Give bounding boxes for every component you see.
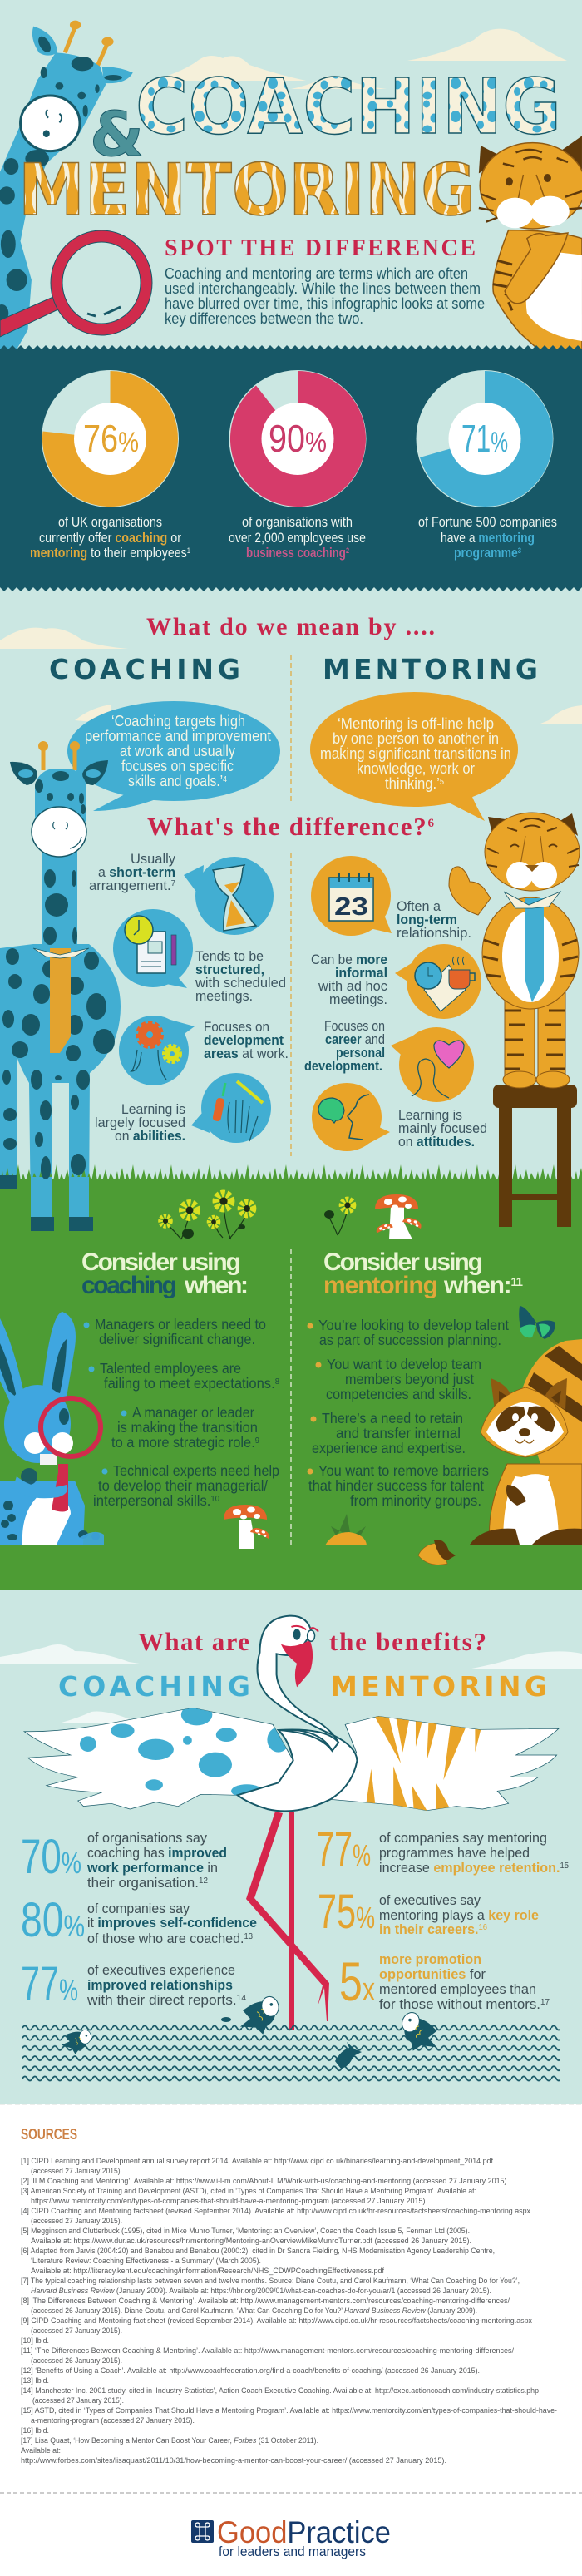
list: coaching: 8 (275, 1377, 279, 1387)
stat: 77% mentoring: 77% (316, 1822, 371, 1876)
heading: mentoring: MENTORING (330, 1670, 547, 1703)
divider (290, 655, 292, 804)
text block: source list: [7] The typical coaching relationship lasts between seven and twelve months. Source: Diane Coutu, and Carol Kaufmann, ‘What Can Coaching Do for You?’, (21, 2277, 520, 2286)
cloud: what do we mean (0, 628, 128, 649)
text block: source list: (accessed 27 January 2015). (31, 2326, 122, 2336)
text block: source list: [13] Ibid. (21, 2376, 49, 2386)
divider (0, 2492, 582, 2494)
illustration: magnifying glass (0, 230, 152, 337)
text: short-term: 7 (171, 879, 175, 888)
text block: source list: (accessed 27 January 2015). (32, 2396, 124, 2405)
text block: source list: Available at: (21, 2446, 61, 2455)
heading: consider coaching: Consider using (81, 1248, 241, 1276)
donut chart: 90%: 90% (269, 417, 327, 460)
intro paragraph: used interchangeably. While the lines between them (165, 280, 481, 297)
text: informal: Can be more (311, 952, 387, 967)
icon bubble: hourglass (184, 857, 274, 935)
text block: source list: (accessed 26 January 2015). (31, 2356, 122, 2366)
fish: jumping (234, 1995, 284, 2040)
list: coaching: is making the transition (117, 1419, 258, 1436)
text block: source list (21, 2157, 557, 2465)
stat: 77% coaching: with their direct reports. (87, 1992, 234, 2008)
stat: 77% mentoring: programmes have helped (379, 1845, 530, 1861)
text block: source list: [4] CIPD Coaching and Mentoring factsheet (revised September 2014). Available at: http://www.cipd.co.uk/hr-resources/factsheets/coaching-mentoring.aspx (21, 2207, 530, 2216)
speech bubble: coaching definition (67, 701, 280, 811)
heading: consider mentoring: mentoring (323, 1272, 438, 1299)
icon: butterfly (519, 1306, 555, 1339)
stat: 75% mentoring (318, 1885, 539, 1939)
text block: source list: [8] ‘The Differences Between Coaching & Mentoring’. Available at: http://www.management-mentors.com/resources/coaching-mentoring-differences/ (21, 2297, 510, 2306)
list: mentoring: You want to remove barriers (318, 1462, 489, 1479)
caption: 90%: over 2,000 employees use (229, 531, 366, 546)
title: MENTORING: MENTORING (18, 149, 476, 232)
text: career and personal (304, 1018, 385, 1074)
text block: source list: [2] ‘ILM Coaching and Mentoring’. Available at: https://www.i-l-m.com/About-ILM/Work-with-us/coaching-and-mentoring (accessed 27 January 2015). (21, 2177, 509, 2186)
stat: 70% coaching: work performance in (86, 1860, 218, 1876)
text: informal: meetings. (329, 991, 387, 1007)
list: coaching: failing to meet expectations. (104, 1375, 284, 1392)
text block: source list: [9] CIPD Coaching and Mentoring fact sheet (revised September 2014). Available at: http://www.cipd.co.uk/hr-resources/factsheets/coaching-mentoring.aspx (21, 2316, 532, 2326)
caption: 90%: 2 (346, 546, 349, 555)
donut chart: 90% (229, 370, 366, 507)
text: short-term: Usually (131, 851, 175, 867)
list: mentoring: You want to develop team (327, 1356, 481, 1372)
list: coaching: deliver significant change. (99, 1331, 255, 1347)
illustration: rabbit with magnifier (0, 1312, 104, 1545)
text: long-term (397, 898, 471, 941)
caption: 76%: 1 (187, 546, 190, 555)
text block: source list: [17] Lisa Quast, ‘How Becoming a Mentor Can Boost Your Career, Forbes (31 October 2011). (21, 2436, 318, 2445)
caption: 71%: programme (454, 546, 530, 561)
text block: source list: [1] CIPD Learning and Development annual survey report 2014. Available at: http://www.cipd.co.uk/binaries/learning-and-development_2014.pdf (21, 2157, 493, 2166)
stat: 77% coaching: 14 (237, 1994, 246, 2003)
text block: source list: Available at: http://literacy.kent.edu/coaching/information/Research/NHS_CDWPCoachingEffectiveness.pdf (31, 2267, 384, 2276)
logo: GoodPractice: GoodPractice (217, 2515, 391, 2549)
stat: 75% mentoring: of executives say (379, 1892, 481, 1908)
caption: 76%: currently offer coaching or (39, 531, 181, 546)
list: coaching: A manager or leader (132, 1404, 254, 1421)
heading: coaching: COACHING (58, 1670, 250, 1703)
list: mentoring: competencies and skills. (326, 1386, 471, 1402)
title: COACHING: COACHING (136, 62, 561, 151)
caption: 90%: of organisations with (242, 515, 353, 530)
list: coaching: Technical experts need help (113, 1462, 279, 1479)
heading: consider mentoring (323, 1248, 523, 1299)
caption: 90%: business coaching (246, 546, 370, 561)
text: structured: with scheduled (195, 975, 286, 991)
text: career and personal: Focuses on (324, 1018, 385, 1034)
flowers: coaching side (160, 1194, 253, 1239)
caption: 76% (30, 515, 190, 561)
list: coaching: 10 (210, 1495, 219, 1504)
text: development areas: development (204, 1032, 284, 1048)
speech bubble: mentoring definition: 5 (440, 778, 444, 787)
stat: 77% coaching: of executives experience (87, 1962, 235, 1978)
heading: mentoring: MENTORING (323, 653, 538, 685)
speech bubble: coaching definition: performance and improvement (85, 728, 271, 744)
intro paragraph: have blurred over time, this infographic looks at some (165, 295, 485, 312)
list: coaching: 9 (255, 1436, 259, 1446)
stat: 5x mentoring: for those without mentors. (379, 1996, 542, 2012)
heading: consider coaching: when: (184, 1272, 249, 1299)
stat: 5x mentoring (339, 1951, 550, 2012)
heading: consider mentoring: when: (444, 1272, 512, 1299)
list: mentoring: experience and expertise. (312, 1440, 466, 1456)
heading: what do we mean by: What do we mean by .... (146, 613, 435, 640)
heading: what's the difference: What's the difference? (147, 812, 427, 841)
donut chart: 71% (416, 370, 554, 507)
list: coaching: interpersonal skills. (93, 1492, 217, 1509)
speech bubble: coaching definition: focuses on specific (121, 758, 234, 774)
mushrooms: centre (375, 1194, 423, 1239)
text: structured (195, 948, 286, 1004)
text: long-term: relationship. (397, 925, 471, 941)
text: long-term: long-term (397, 912, 457, 927)
stat: 70% coaching: of organisations say (87, 1830, 207, 1846)
icon bubble: heart (391, 1027, 474, 1102)
fish: droplet (221, 2017, 231, 2022)
icon bubble: calendar: 23 (334, 892, 368, 921)
text block: source list: [11] ‘The Differences Between Coaching & Mentoring’. Available at: http://www.management-mentors.com/resources/coaching-mentoring-differences/ (21, 2346, 514, 2356)
stat: 5x mentoring: more promotion (379, 1951, 481, 1967)
text: career and personal: personal (336, 1045, 385, 1061)
caption: 71%: of Fortune 500 companies (418, 515, 557, 530)
speech bubble: mentoring definition (310, 692, 518, 821)
stat: 70% coaching: coaching has improved (87, 1845, 227, 1861)
stat: 80% coaching: 80% (21, 1893, 85, 1947)
illustration: flamingo legs (246, 1812, 329, 2030)
clouds: header (152, 29, 567, 89)
text: structured: Tends to be (195, 948, 264, 964)
text: abilities: largely focused (95, 1115, 185, 1130)
caption: 90% (229, 515, 366, 561)
illustration: flamingo (24, 1616, 559, 1811)
divider (290, 853, 292, 1156)
icon bubble: calendar (311, 856, 392, 936)
fish: right (392, 2010, 446, 2059)
list: coaching (83, 1316, 279, 1509)
cloud: mentor bubble (540, 705, 582, 724)
list: mentoring: that hinder success for talent (308, 1477, 484, 1494)
stat: 77% mentoring: of companies say mentoring (379, 1830, 547, 1846)
icon bubble: speech (312, 1083, 390, 1151)
text: development areas: areas at work. (204, 1046, 289, 1061)
text: structured: meetings. (195, 988, 253, 1004)
stat: 77% coaching: improved relationships (87, 1977, 233, 1993)
list: mentoring: from minority groups. (350, 1492, 481, 1509)
list: mentoring (308, 1317, 509, 1509)
text block: source list: a-mentoring-program (accessed 27 January 2015). (31, 2416, 195, 2425)
caption: 76%: of UK organisations (58, 515, 162, 530)
stat: 75% mentoring: 75% (318, 1885, 375, 1939)
donut chart: 71%: 71% (461, 417, 508, 460)
speech bubble: coaching definition: at work and usually (120, 743, 235, 759)
illustration: blue giraffe with tie (0, 741, 121, 1231)
stat: 75% mentoring: mentoring plays a key role (379, 1907, 539, 1923)
heading: consider coaching (81, 1248, 249, 1299)
giraffe legs over grass (0, 1154, 93, 1231)
text: informal: informal (335, 965, 387, 981)
fish: diving (335, 2042, 362, 2069)
acorn (418, 1540, 456, 1565)
speech bubble: mentoring definition: thinking.’ (385, 775, 444, 792)
heading: spot the difference: SPOT THE DIFFERENCE (165, 235, 476, 261)
text block: source list: [3] American Society of Training and Development (ASTD), cited in ‘Types of Companies That Should Have a Mentoring Program’. Available at: (21, 2187, 476, 2196)
panel: statistics band (0, 345, 582, 591)
stat: 70% coaching: their organisation. (87, 1875, 200, 1891)
caption: 71%: have a mentoring (441, 531, 535, 546)
speech bubble: coaching definition: skills and goals.’ (128, 773, 237, 789)
icon bubble: gears (119, 1016, 195, 1085)
text block: source list: [6] Adapted from Jarvis (2004:20) and Benabou and Benabou (2000:2), cited in Dr Sandra Fielding, NHS Modernisation Agency Leadership Centre, (21, 2247, 495, 2256)
cloud: coach bubble (75, 705, 111, 724)
text: attitudes: mainly focused (398, 1120, 487, 1136)
mushroom: lower left (224, 1505, 271, 1549)
illustration: raccoon (470, 1339, 582, 1545)
heading: what are: What are (138, 1627, 249, 1656)
stat: 80% coaching (21, 1893, 257, 1947)
divider (290, 1249, 292, 1548)
text block: source list: (accessed 26 January 2015). Diane Coutu, and Carol Kaufmann, ‘What Can Coaching Do for You?’ Harvard Business Review (January 2009). (31, 2307, 477, 2316)
list: coaching: to a more strategic role. (111, 1434, 264, 1451)
text block: source list: (accessed 27 January 2015). (31, 2167, 122, 2176)
list: mentoring: There’s a need to retain (322, 1410, 463, 1426)
stat: 77% coaching (21, 1957, 246, 2011)
list: coaching: Managers or leaders need to (95, 1316, 266, 1332)
intro paragraph: Coaching and mentoring are terms which are often (165, 265, 468, 282)
logo: GoodPractice: for leaders and managers (219, 2544, 366, 2559)
list: coaching: Talented employees are (100, 1360, 241, 1377)
stat: 5x mentoring: opportunities for (379, 1966, 486, 1982)
speech bubble: mentoring definition: making significant transitions in (320, 745, 511, 762)
icon bubble: coffee and clock (395, 944, 481, 1019)
stat: 77% mentoring: increase employee retention. (379, 1860, 567, 1876)
stat: 75% mentoring: 16 (479, 1923, 487, 1932)
text block: source list: [5] Megginson and Clutterbuck (1995), cited in Mike Munro Turner, ‘Mentoring: an Overview’, Coach the Coach Issue 5, Fenman Ltd (2005). (21, 2227, 470, 2236)
heading: sources: SOURCES (21, 2126, 77, 2143)
text block: source list: [16] Ibid. (21, 2426, 49, 2435)
donut chart: 76%: 76% (83, 417, 139, 460)
waves (22, 2023, 560, 2084)
flower: mentoring side (324, 1199, 353, 1235)
illustration: tiger thinking (479, 136, 582, 349)
stat: 77% mentoring: 15 (560, 1862, 569, 1871)
text block: source list: [12] ‘Benefits of Using a Coach’. Available at: http://www.coachfederation.org/find-a-coach/benefits-of-coaching/ (accessed 26 January 2015). (21, 2366, 480, 2376)
text: short-term (89, 851, 175, 893)
list: mentoring: You’re looking to develop talent (318, 1317, 509, 1333)
text: short-term: a short-term (98, 864, 175, 880)
stat: 80% coaching: of those who are coached. (87, 1931, 253, 1946)
intro paragraph (165, 265, 485, 327)
list: mentoring: members beyond just (345, 1371, 474, 1387)
icon bubble: tools (191, 1073, 271, 1143)
heading: consider mentoring: 11 (510, 1275, 523, 1289)
text: informal (311, 952, 387, 1007)
stat: 5x mentoring: 17 (540, 1998, 550, 2007)
text block: source list: Harvard Business Review (January 2009). Available at: https://hbr.org/2009/01/what-can-coaches-do-for-you/ar/1 (accessed 26 January 2015). (31, 2287, 491, 2296)
caption: 71%: 3 (518, 546, 521, 555)
stat: 70% coaching: 70% (21, 1830, 81, 1884)
text block: source list: https://www.mentorcity.com/en/types-of-companies-that-should-have-a-mentoring-program (accessed 27 January 2015). (31, 2197, 427, 2206)
donut chart: 76% (42, 370, 179, 507)
stat: 77% mentoring (316, 1822, 569, 1876)
text: abilities: Learning is (121, 1101, 185, 1117)
logo: GoodPractice (191, 2515, 391, 2559)
text: abilities (95, 1101, 185, 1144)
speech bubble: coaching definition: 4 (223, 775, 227, 784)
illustration: blue giraffe peeking (0, 21, 133, 349)
speech bubble: mentoring definition: knowledge, work or (357, 760, 475, 777)
heading: consider coaching: coaching (81, 1272, 177, 1299)
tuft (325, 1514, 367, 1545)
text: informal: with ad hoc (318, 978, 387, 994)
list: mentoring: as part of succession planning. (319, 1332, 501, 1348)
list: mentoring: and transfer internal (336, 1425, 461, 1441)
text: structured: structured, (195, 962, 264, 977)
stat: 5x mentoring: 5x (339, 1951, 375, 2012)
stat: 70% coaching: 12 (199, 1876, 208, 1886)
text: attitudes (398, 1107, 487, 1150)
heading: what's the difference: 6 (427, 817, 434, 830)
stat: 80% coaching: of companies say (87, 1901, 190, 1916)
icon bubble: schedule clock (113, 909, 193, 988)
speech bubble: mentoring definition: ‘Mentoring is off-line help (338, 715, 494, 732)
speech bubble: coaching definition: ‘Coaching targets high (111, 713, 245, 729)
heading: coaching: COACHING (49, 653, 240, 685)
heading: consider mentoring: Consider using (323, 1248, 483, 1276)
caption: 76%: mentoring to their employees (30, 546, 204, 561)
stat: 77% coaching: 77% (21, 1957, 78, 2011)
title: ampersand: & (90, 99, 144, 171)
text block: source list: Available at: https://www.dur.ac.uk/resources/hr/mentoring/Mentoring-anOverviewMikeMunroTurner.pdf (accessed 26 January 2015). (31, 2237, 471, 2246)
text block: source list: [14] Manchester Inc. 2001 study, cited in ‘Industry Statistics’, Action Coach Executive Coaching. Available at: http://exec.actioncoach.com/industry-statistics.php (21, 2386, 539, 2396)
caption: 71% (418, 515, 557, 561)
heading: the benefits: the benefits? (329, 1627, 486, 1656)
text: abilities: on abilities. (115, 1128, 185, 1144)
clouds: benefits (0, 1644, 582, 1723)
panel: grass field (0, 1161, 582, 1590)
stat: 75% mentoring: in their careers. (379, 1921, 485, 1937)
text: attitudes: on attitudes. (398, 1134, 475, 1150)
illustration: tiger with tie (449, 813, 580, 1088)
stat: 70% coaching (21, 1830, 227, 1891)
list: coaching: to develop their managerial/ (98, 1477, 268, 1494)
stat: 5x mentoring: mentored employees than (379, 1981, 536, 1997)
text block: source list: ‘Literature Review: Coaching Effectiveness - a Summary’ (March 2005). (31, 2257, 261, 2266)
stool (493, 1085, 577, 1227)
text: short-term: arrangement. (89, 878, 173, 893)
text block: source list: (accessed 27 January 2015). (31, 2217, 122, 2226)
text: long-term: Often a (397, 898, 441, 914)
intro paragraph: key differences between the two. (165, 310, 363, 327)
text block: source list: [10] Ibid. (21, 2336, 49, 2346)
text block: source list: http://www.forbes.com/sites/lisaquast/2011/10/31/how-becoming-a-mentor-can-boost-your-career/ (accessed 27 January 2015). (21, 2456, 446, 2465)
fish: left (62, 2030, 91, 2054)
text: development areas (204, 1019, 289, 1061)
speech bubble: mentoring definition: by one person to another in (333, 730, 499, 747)
text: attitudes: Learning is (398, 1107, 462, 1123)
text: development areas: Focuses on (204, 1019, 269, 1035)
stat: 80% coaching: 13 (244, 1932, 253, 1941)
stat: 80% coaching: it improves self-confidence (87, 1915, 257, 1931)
text: career and personal: development. (304, 1058, 382, 1074)
section divider: top of sources (0, 2104, 582, 2105)
text: career and personal: career and (325, 1031, 385, 1047)
